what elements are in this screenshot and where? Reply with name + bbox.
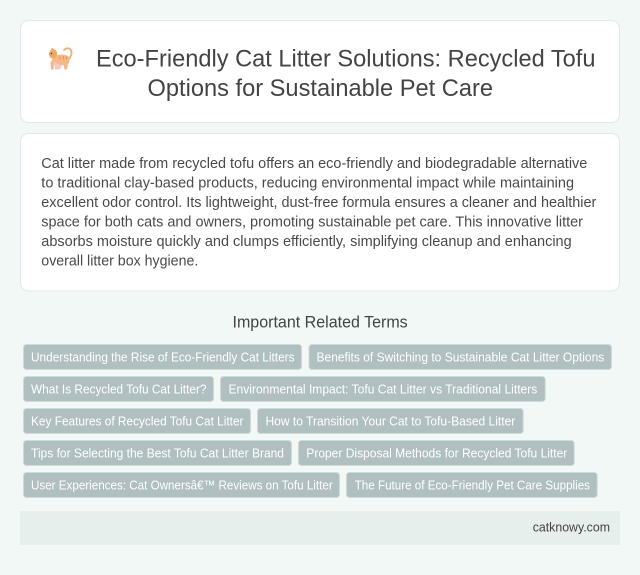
heading: title [96, 46, 596, 102]
heading: title: Options for Sustainable Pet Care [148, 75, 493, 102]
text block: description: Cat litter made from recycled tofu offers an eco-friendly and biodegradable alternative [41, 156, 587, 172]
text block: description [41, 156, 596, 270]
tag [258, 408, 523, 434]
tag: Benefits of Switching to Sustainable Cat Litter Options [316, 349, 604, 364]
text block: description: absorbs moisture quickly and clumps efficiently, simplifying cleanup and enhancing [41, 234, 572, 250]
tag: Environmental Impact: Tofu Cat Litter vs Traditional Litters [228, 381, 537, 396]
tag [298, 440, 574, 466]
tag [24, 472, 340, 498]
tag [220, 376, 545, 402]
tag [309, 344, 612, 370]
tag [24, 344, 302, 370]
text block: description: excellent odor control. Its lightweight, dust-free formula ensures a cleaner and healthier [41, 195, 596, 211]
text block: description: space for both cats and owners, promoting sustainable pet care. This innovative litter [41, 215, 583, 231]
heading: title: Eco-Friendly Cat Litter Solutions: Recycled Tofu [96, 46, 596, 72]
tag [24, 440, 292, 466]
tag: Key Features of Recycled Tofu Cat Litter [31, 413, 244, 428]
tag list: related terms [24, 344, 612, 498]
panel: title card [20, 20, 620, 122]
tag: Understanding the Rise of Eco-Friendly Cat Litters [31, 349, 294, 364]
heading: important related terms: Important Related Terms [232, 313, 408, 331]
panel: description card [20, 134, 620, 291]
tag: Tips for Selecting the Best Tofu Cat Litter Brand [31, 445, 284, 460]
footer: site name: catknowy.com [533, 520, 610, 535]
tag: How to Transition Your Cat to Tofu-Based Litter [266, 413, 516, 428]
icon: cat [49, 48, 72, 70]
tag: User Experiences: Cat Ownersâ€™ Reviews on Tofu Litter [31, 477, 333, 492]
tag [24, 376, 214, 402]
text block: description: to traditional clay-based products, reducing environmental impact while maintaining [41, 176, 574, 192]
tag [24, 408, 250, 434]
tag: Proper Disposal Methods for Recycled Tofu Litter [306, 445, 568, 460]
footer [20, 511, 620, 545]
tag [346, 472, 597, 498]
tag: What Is Recycled Tofu Cat Litter? [31, 381, 206, 396]
text block: description: overall litter box hygiene. [41, 254, 198, 270]
tag: The Future of Eco-Friendly Pet Care Supplies [355, 477, 590, 492]
